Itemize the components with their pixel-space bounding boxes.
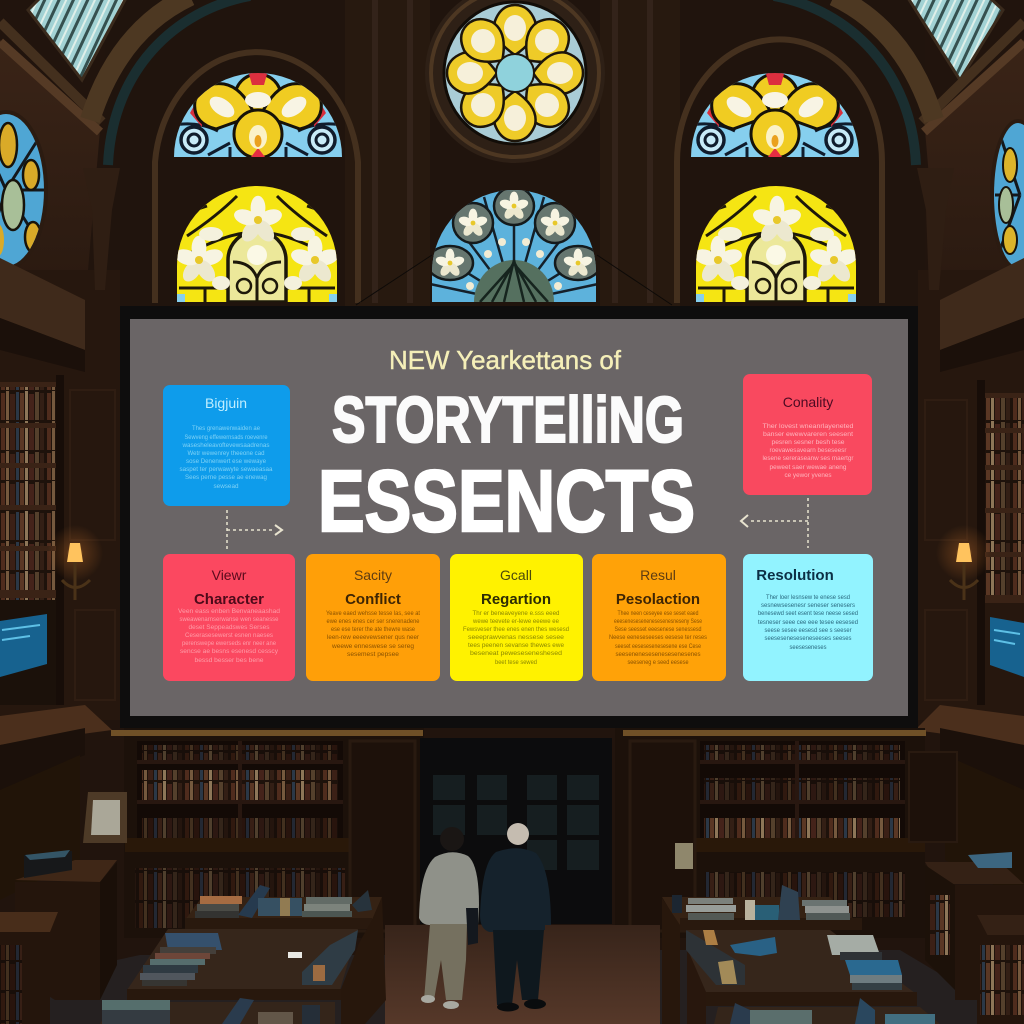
card: character: Viewr — [212, 567, 247, 583]
screen right wall display — [990, 617, 1024, 677]
card: pesolaction — [592, 554, 726, 681]
carved cornices and vault arches — [0, 0, 1024, 303]
skylight left — [28, 0, 126, 80]
card: conality: banser ewewvareren seesent — [763, 432, 853, 438]
card: regartion: Thr er beneaveyene e.sss eeed — [472, 611, 560, 617]
reading table right back — [662, 885, 862, 1024]
hanging wires — [356, 255, 672, 305]
card: regartion: Fewsveser thee enes enen thes wesesd — [463, 627, 569, 633]
card: conality: pesren sesner besh tese — [772, 440, 845, 446]
side desk front left — [0, 912, 58, 1024]
lower wall bookcase right — [615, 728, 957, 938]
card: conality — [743, 374, 872, 495]
left wall bookcase — [0, 375, 64, 705]
card: resolution: seeseseneses — [790, 645, 826, 651]
card: resolution: Resolution — [756, 567, 834, 584]
card: conflict: weewe enneswese se sereg — [331, 644, 414, 650]
projection screen — [120, 306, 918, 728]
reading table left middle — [127, 929, 358, 1024]
stained glass: upper right fanlight — [691, 72, 859, 158]
card: regartion: beet tese sewed — [495, 660, 537, 666]
stained glass: right side window — [994, 119, 1024, 264]
stained glass: central fan window — [432, 190, 596, 302]
card: pesolaction: Pesolaction — [616, 591, 700, 608]
arrow: conality to resolution — [741, 498, 808, 548]
card: resolution: benesewd seet esent tese neese sesed — [758, 611, 858, 617]
card: regartion: Regartion — [481, 591, 551, 608]
wall lamp right — [936, 525, 992, 600]
card: pesolaction: seeset eesesesenesesene ese Cese — [615, 644, 702, 650]
card: pesolaction: Thee neen ceseyee ese seset eaed — [618, 611, 698, 617]
card: beginning: sewsead — [214, 484, 238, 490]
lower wall bookcase left — [124, 728, 424, 938]
card: conflict: Yeave eaed wehsse tesse las, see at — [326, 611, 420, 617]
side desk back right — [925, 852, 1024, 1000]
card: regartion: seeeprawvenas nessese sesee — [468, 635, 565, 641]
wall plaque left — [83, 792, 127, 843]
arrow: beginning to character — [227, 510, 282, 550]
card: beginning: Bigjuin — [205, 395, 247, 411]
card: beginning: wasesheleavoftevewsaadrenas — [181, 443, 270, 449]
floor — [0, 925, 1024, 1024]
card: conality: lesene sereraseanw ses maertgr — [762, 456, 854, 462]
balcony ledges — [0, 705, 1024, 900]
card: character: perenswepe ewerseds enr neer ane — [182, 641, 277, 647]
card: beginning: sose Denenwert ese wewaye — [186, 459, 267, 465]
title line two: ESSENCTS — [318, 453, 695, 550]
card: character: Veen eass enben Benvaneaashad — [178, 609, 280, 615]
card: beginning — [163, 385, 290, 506]
card: regartion — [450, 554, 583, 681]
title line one: STORYTElliNG — [332, 383, 684, 456]
card: pesolaction: seesenenesesenesesenesenes — [616, 652, 700, 658]
books on right middle table — [686, 930, 902, 990]
reading table right front — [714, 998, 940, 1024]
card: character — [163, 554, 295, 681]
card: resolution: tesneser seee cee eee tesee eesesed — [758, 620, 858, 626]
card: character: sweawenarnserwanse wen seanesse — [180, 617, 279, 623]
card: character: Character — [194, 591, 264, 608]
person: right visitor in dark coat — [480, 823, 551, 1012]
card: pesolaction: seeseneg e seed eesese — [628, 660, 689, 666]
books on back table — [195, 885, 372, 918]
skylight right — [908, 0, 1003, 80]
card: conality: Ther lovest wneanrlayeneted — [762, 424, 854, 430]
card: regartion: Gcall — [500, 567, 532, 583]
card: conflict: ese ese terer the ate thewre wase — [331, 627, 416, 633]
stained glass: upper left fanlight — [174, 72, 342, 158]
central glazed door — [420, 738, 612, 924]
books on right back table — [672, 885, 850, 920]
card: resolution: sesnewsesenesr seneser senesers — [761, 603, 855, 609]
stained glass: central rose window — [425, 0, 605, 163]
books on middle table — [140, 930, 358, 986]
person: left visitor in grey hoodie — [419, 827, 479, 1009]
card: character: bessd besser bes bene — [194, 658, 264, 664]
side wall ledges — [0, 258, 1024, 372]
posted note on pillar — [675, 843, 693, 869]
card: pesolaction: Resul — [640, 567, 676, 583]
card: beginning: Sees perne pesse ae enewag — [185, 475, 267, 481]
stained glass: lower right yellow window — [692, 184, 860, 304]
card: regartion: wewe teevete er-lewe eeewe ee — [472, 619, 560, 625]
card: conflict: sesemest pepsee — [347, 652, 400, 658]
card: conality: peweet saer wewae aneng — [770, 465, 846, 471]
card: conality: roevawesavearn beseseesr — [770, 448, 847, 454]
card: pesolaction: Neese eeneseseeses eesese ter reses — [609, 635, 707, 641]
screen left wall display — [0, 614, 47, 677]
card: conflict: Conflict — [345, 591, 401, 608]
card: character: Ceserasesewerst esnen naeses — [185, 633, 273, 639]
reading table left back — [185, 885, 386, 1024]
card: resolution: seese sesee eesesd see s seeser — [764, 628, 852, 634]
screen surface — [130, 319, 908, 716]
projector rail right — [623, 730, 926, 736]
card: regartion: beseneat peweseseneshesed — [470, 651, 562, 657]
side desk back left — [15, 850, 117, 1000]
stained glass: left side window — [0, 110, 44, 264]
card: beginning: Sewveng effewernsads roevenre — [184, 435, 268, 441]
card: beginning: Wetr wewenrey theeone cad — [188, 451, 264, 457]
screen frame — [120, 306, 918, 728]
left wall panelling — [70, 390, 115, 700]
projector rail left — [111, 730, 423, 736]
card: pesolaction: Sese seesset eeesenese senessesd — [614, 627, 702, 633]
side desk front right — [977, 915, 1024, 1024]
card: conflict: leen-rew eeeevewsener qus neer — [327, 635, 419, 641]
card: resolution — [743, 554, 873, 681]
subtitle: NEW Yearkettans of — [389, 345, 622, 375]
card: character: sencse ae besns esenesd cesscy — [180, 649, 278, 655]
card: conality: Conality — [783, 394, 833, 410]
right wall panelling — [925, 400, 967, 700]
card: character: deset Seppeadswes Serses — [188, 625, 270, 631]
card: conality: ce yewor yvenes — [784, 473, 832, 479]
card: resolution: seeseseneseseneseeses seeses — [764, 636, 852, 642]
reading table right middle — [686, 930, 917, 1024]
reading table left front — [100, 998, 335, 1024]
card: beginning: Thes grenawenwaiden ae — [192, 426, 261, 432]
carved column capitals — [83, 168, 954, 290]
stained glass: lower left yellow window — [173, 184, 341, 304]
card: conflict: Sacity — [354, 567, 392, 583]
card: beginning: saspet ter perwawyte sewaeasaa — [180, 467, 273, 473]
card: resolution: Ther loer lesnsew te enese sesd — [766, 595, 850, 601]
right wall bookcase — [977, 380, 1024, 705]
card: regartion: tees peenen sevanse thewes ewe — [468, 643, 565, 649]
card: conflict — [306, 554, 440, 681]
card: pesolaction: eeesenesesenenesesenesneseny Sese — [614, 619, 703, 625]
card: conflict: ewe enes enes cer ser snerenadene — [326, 619, 420, 625]
wall lamp left — [47, 525, 103, 600]
